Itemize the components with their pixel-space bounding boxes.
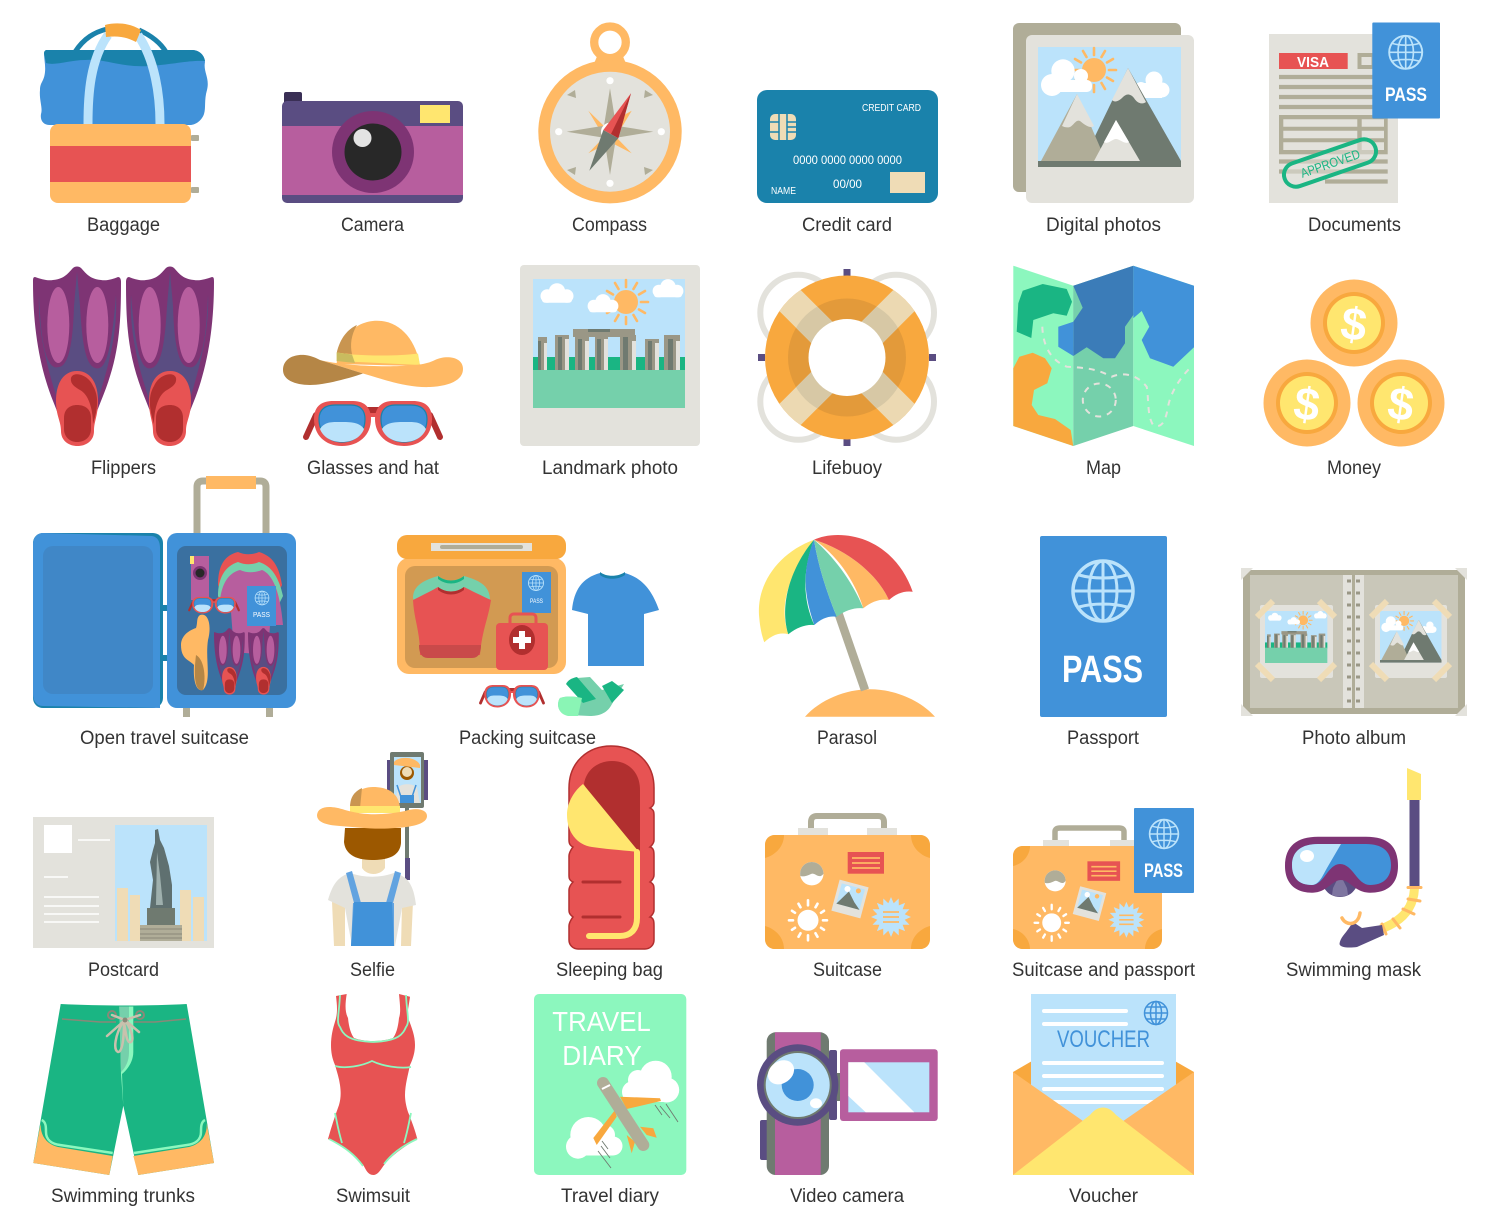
label: Compass: Compass: [572, 215, 647, 236]
label: Video camera: Video camera: [790, 1186, 904, 1207]
label: Credit card: Credit card: [802, 215, 892, 236]
icon: money: [1264, 280, 1444, 446]
label: Money: Money: [1327, 458, 1381, 479]
label: Photo album: Photo album: [1302, 728, 1406, 749]
icon: map: [1013, 266, 1194, 446]
icon: travel diary: TRAVEL: [552, 1006, 651, 1037]
icon: money: $: [1385, 376, 1417, 432]
label: Landmark photo: Landmark photo: [542, 458, 678, 479]
icon: documents: [1269, 22, 1440, 203]
icon: suitcase and passport: PASS: [1144, 861, 1183, 882]
icon: travel diary: DIARY: [562, 1040, 642, 1071]
icon: money: $: [1338, 296, 1370, 352]
label: Glasses and hat: Glasses and hat: [307, 458, 440, 479]
icon: selfie: [317, 752, 428, 946]
label: Flippers: Flippers: [91, 458, 156, 479]
label: Swimming trunks: Swimming trunks: [51, 1186, 195, 1207]
icon: packing suitcase: PASS: [530, 598, 544, 605]
icon: swimsuit: [328, 994, 417, 1175]
icon: credit card: 00/00: [833, 177, 862, 191]
label: Swimsuit: Swimsuit: [336, 1186, 411, 1207]
label: Postcard: Postcard: [88, 960, 159, 981]
label: Digital photos: Digital photos: [1046, 215, 1161, 236]
icon: baggage: [40, 23, 208, 203]
icon: swimming trunks: [33, 1004, 214, 1175]
icon: digital photos: [1013, 23, 1194, 203]
label: Passport: Passport: [1067, 728, 1140, 749]
icon: video camera: [757, 1032, 938, 1175]
icon: credit card: 0000 0000 0000 0000: [793, 153, 902, 167]
label: Suitcase and passport: Suitcase and passport: [1012, 960, 1196, 981]
icon: travel diary: [534, 994, 686, 1175]
icon: documents: VISA: [1297, 54, 1329, 71]
icon: photo album: [1241, 568, 1467, 716]
icon: passport: [1040, 536, 1167, 717]
icon: parasol: [759, 535, 935, 717]
label: Parasol: Parasol: [817, 728, 877, 749]
icon: passport: PASS: [1062, 649, 1143, 691]
label: Swimming mask: Swimming mask: [1286, 960, 1421, 981]
label: Camera: Camera: [341, 215, 404, 236]
label: Map: Map: [1086, 458, 1121, 479]
icon: money: $: [1291, 376, 1323, 432]
icon: suitcase: [765, 816, 930, 949]
label: Selfie: Selfie: [350, 960, 395, 981]
icon: documents: PASS: [1385, 85, 1427, 106]
icon: credit card: [757, 90, 938, 203]
label: Packing suitcase: Packing suitcase: [459, 728, 596, 749]
label: Baggage: Baggage: [87, 215, 160, 236]
icon: documents: APPROVED: [1298, 146, 1362, 181]
icon: packing suitcase: [397, 535, 659, 716]
label: Travel diary: Travel diary: [561, 1186, 659, 1207]
icon: glasses and hat: [283, 321, 463, 446]
label: Suitcase: Suitcase: [813, 960, 882, 981]
icon: voucher: [1013, 994, 1194, 1175]
icon: camera: [282, 92, 463, 203]
label: Sleeping bag: Sleeping bag: [556, 960, 663, 981]
icon: voucher: VOUCHER: [1057, 1026, 1150, 1053]
icon: landmark photo: [520, 265, 700, 446]
icon: sleeping bag: [567, 746, 654, 949]
icon: suitcase and passport: [1013, 808, 1194, 949]
icon: compass: [538, 26, 682, 203]
icon: open travel suitcase: [33, 476, 296, 717]
icon: credit card: NAME: [771, 186, 796, 197]
label: Lifebuoy: Lifebuoy: [812, 458, 882, 479]
icon: flippers: [33, 266, 214, 446]
icon: postcard: [33, 817, 214, 948]
icon: lifebuoy: [758, 269, 936, 446]
label: Voucher: Voucher: [1069, 1186, 1139, 1207]
label: Open travel suitcase: Open travel suitcase: [80, 728, 249, 749]
icon: credit card: CREDIT CARD: [862, 103, 921, 114]
icon: swimming mask: [1285, 768, 1421, 948]
label: Documents: Documents: [1308, 215, 1401, 236]
icon: open travel suitcase: PASS: [253, 610, 270, 619]
